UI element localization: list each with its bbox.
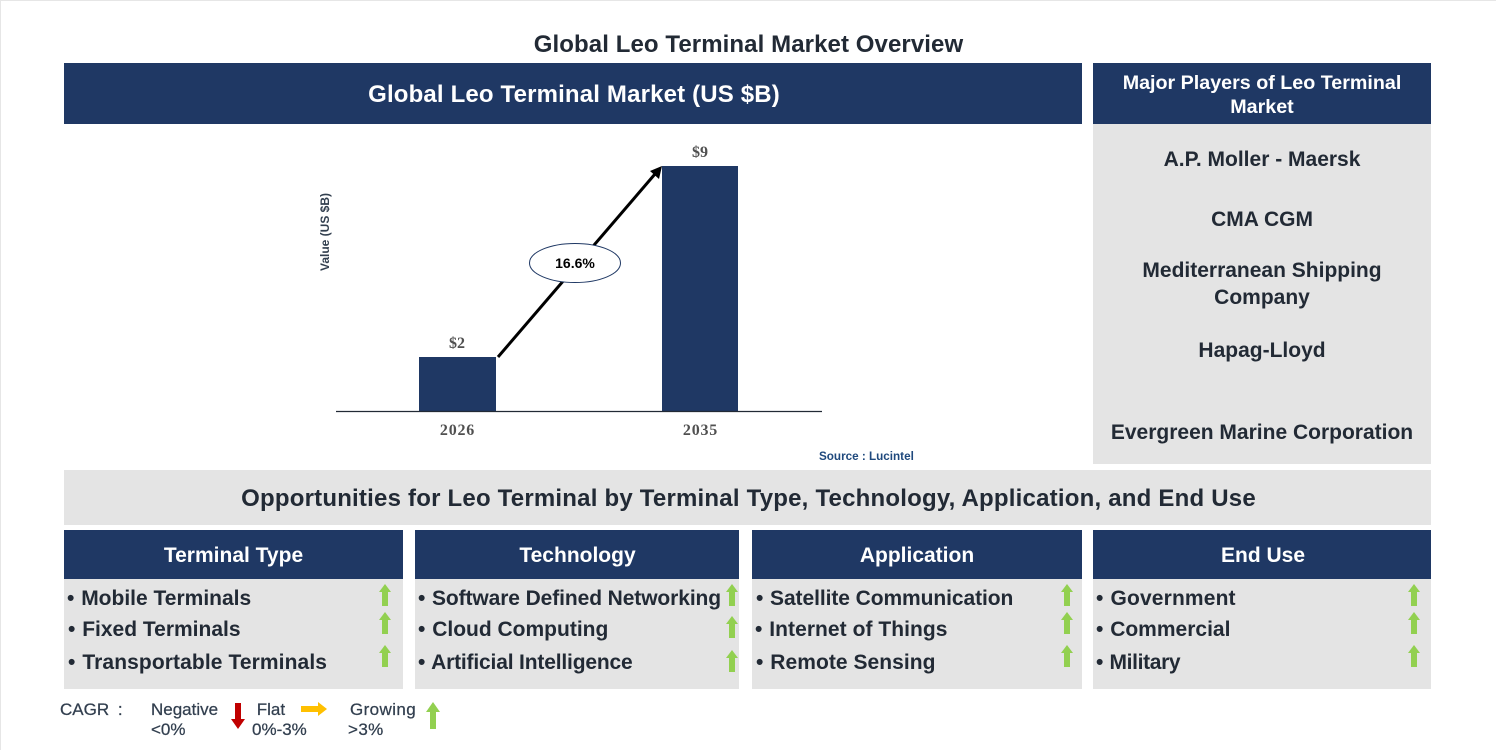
item: • Transportable Terminals bbox=[68, 651, 327, 674]
item: • Cloud Computing bbox=[418, 618, 608, 641]
icon: up arrow bbox=[1408, 612, 1420, 634]
icon: up arrow bbox=[1061, 612, 1073, 634]
growing label: >3% bbox=[348, 720, 384, 739]
heading bbox=[752, 530, 1082, 579]
item: • Remote Sensing bbox=[756, 651, 936, 674]
item: • Government bbox=[1096, 587, 1236, 610]
player: CMA CGM: CMA CGM bbox=[1211, 208, 1313, 231]
negative label: Negative bbox=[151, 700, 218, 719]
flat label: 0%-3% bbox=[252, 720, 307, 739]
icon: up arrow bbox=[726, 650, 738, 672]
value label $2: $2 bbox=[449, 335, 465, 352]
player: Mediterranean Shipping Company: Mediterranean Shipping bbox=[1142, 259, 1382, 282]
icon: up arrow bbox=[379, 645, 391, 667]
player: A.P. Moller - Maersk: A.P. Moller - Maersk bbox=[1164, 148, 1360, 171]
flat label bbox=[252, 700, 307, 739]
player: Evergreen Marine Corporation: Evergreen Marine Corporation bbox=[1111, 421, 1413, 444]
players header: Major Players of Leo Terminal Market bbox=[1123, 72, 1401, 118]
icon: up arrow bbox=[726, 584, 738, 606]
icon: flat arrow bbox=[301, 702, 327, 716]
icon: up arrow bbox=[726, 616, 738, 638]
heading bbox=[1093, 530, 1431, 579]
opportunities banner: Opportunities for Leo Terminal by Terminal Type, Technology, Application, and End Use bbox=[241, 485, 1256, 512]
title: Global Leo Terminal Market Overview bbox=[534, 31, 963, 58]
item: • Artificial Intelligence bbox=[418, 651, 633, 674]
icon: up arrow bbox=[1408, 645, 1420, 667]
player: Mediterranean Shipping Company: Company bbox=[1214, 286, 1310, 309]
chart header: Global Leo Terminal Market (US $B) bbox=[368, 80, 780, 108]
flat label: Flat bbox=[257, 700, 285, 719]
CAGR ellipse bbox=[530, 244, 620, 282]
item: • Military bbox=[1096, 651, 1180, 674]
icon: down arrow bbox=[231, 703, 245, 729]
category 2035: 2035 bbox=[683, 422, 718, 439]
panel: end use bbox=[1093, 530, 1431, 689]
icon: up arrow bbox=[1061, 645, 1073, 667]
panel: major players bbox=[1093, 124, 1431, 464]
players header bbox=[1093, 63, 1431, 124]
icon: up arrow bbox=[1408, 584, 1420, 606]
item: • Fixed Terminals bbox=[68, 618, 241, 641]
legend bbox=[60, 700, 440, 739]
heading: Technology bbox=[519, 544, 636, 566]
item: • Mobile Terminals bbox=[67, 587, 251, 610]
heading bbox=[64, 530, 403, 579]
legend title: CAGR : bbox=[60, 700, 123, 719]
bar 2035 bbox=[662, 166, 738, 412]
item: • Software Defined Networking bbox=[418, 587, 721, 610]
opportunities banner bbox=[64, 470, 1431, 525]
negative label: <0% bbox=[151, 720, 186, 739]
icon: growing arrow bbox=[426, 702, 440, 729]
source: Source : Lucintel bbox=[819, 450, 914, 463]
panel: terminal type bbox=[64, 530, 403, 689]
category 2026: 2026 bbox=[440, 422, 475, 439]
growing label: Growing bbox=[350, 700, 416, 719]
player: Mediterranean Shipping Company bbox=[1142, 259, 1382, 309]
growth arrow bbox=[498, 166, 662, 357]
bar 2026 bbox=[419, 357, 496, 412]
CAGR ellipse: 16.6% bbox=[555, 255, 595, 271]
negative label bbox=[151, 700, 218, 739]
chart header bbox=[64, 63, 1082, 124]
item: • Commercial bbox=[1096, 618, 1230, 641]
player: Hapag-Lloyd: Hapag-Lloyd bbox=[1198, 339, 1326, 362]
heading: End Use bbox=[1221, 544, 1305, 566]
icon: up arrow bbox=[1061, 584, 1073, 606]
panel: technology bbox=[415, 530, 739, 689]
heading: Application bbox=[860, 544, 974, 566]
icon: up arrow bbox=[379, 612, 391, 634]
panel: application bbox=[752, 530, 1082, 689]
heading: Terminal Type bbox=[164, 544, 303, 566]
item: • Satellite Communication bbox=[756, 587, 1013, 610]
growing label bbox=[348, 700, 416, 739]
y axis label: Value (US $B) bbox=[318, 193, 332, 271]
item: • Internet of Things bbox=[755, 618, 948, 641]
heading bbox=[415, 530, 739, 579]
bar chart bbox=[318, 144, 914, 463]
icon: up arrow bbox=[379, 584, 391, 606]
value label $9: $9 bbox=[692, 144, 708, 161]
